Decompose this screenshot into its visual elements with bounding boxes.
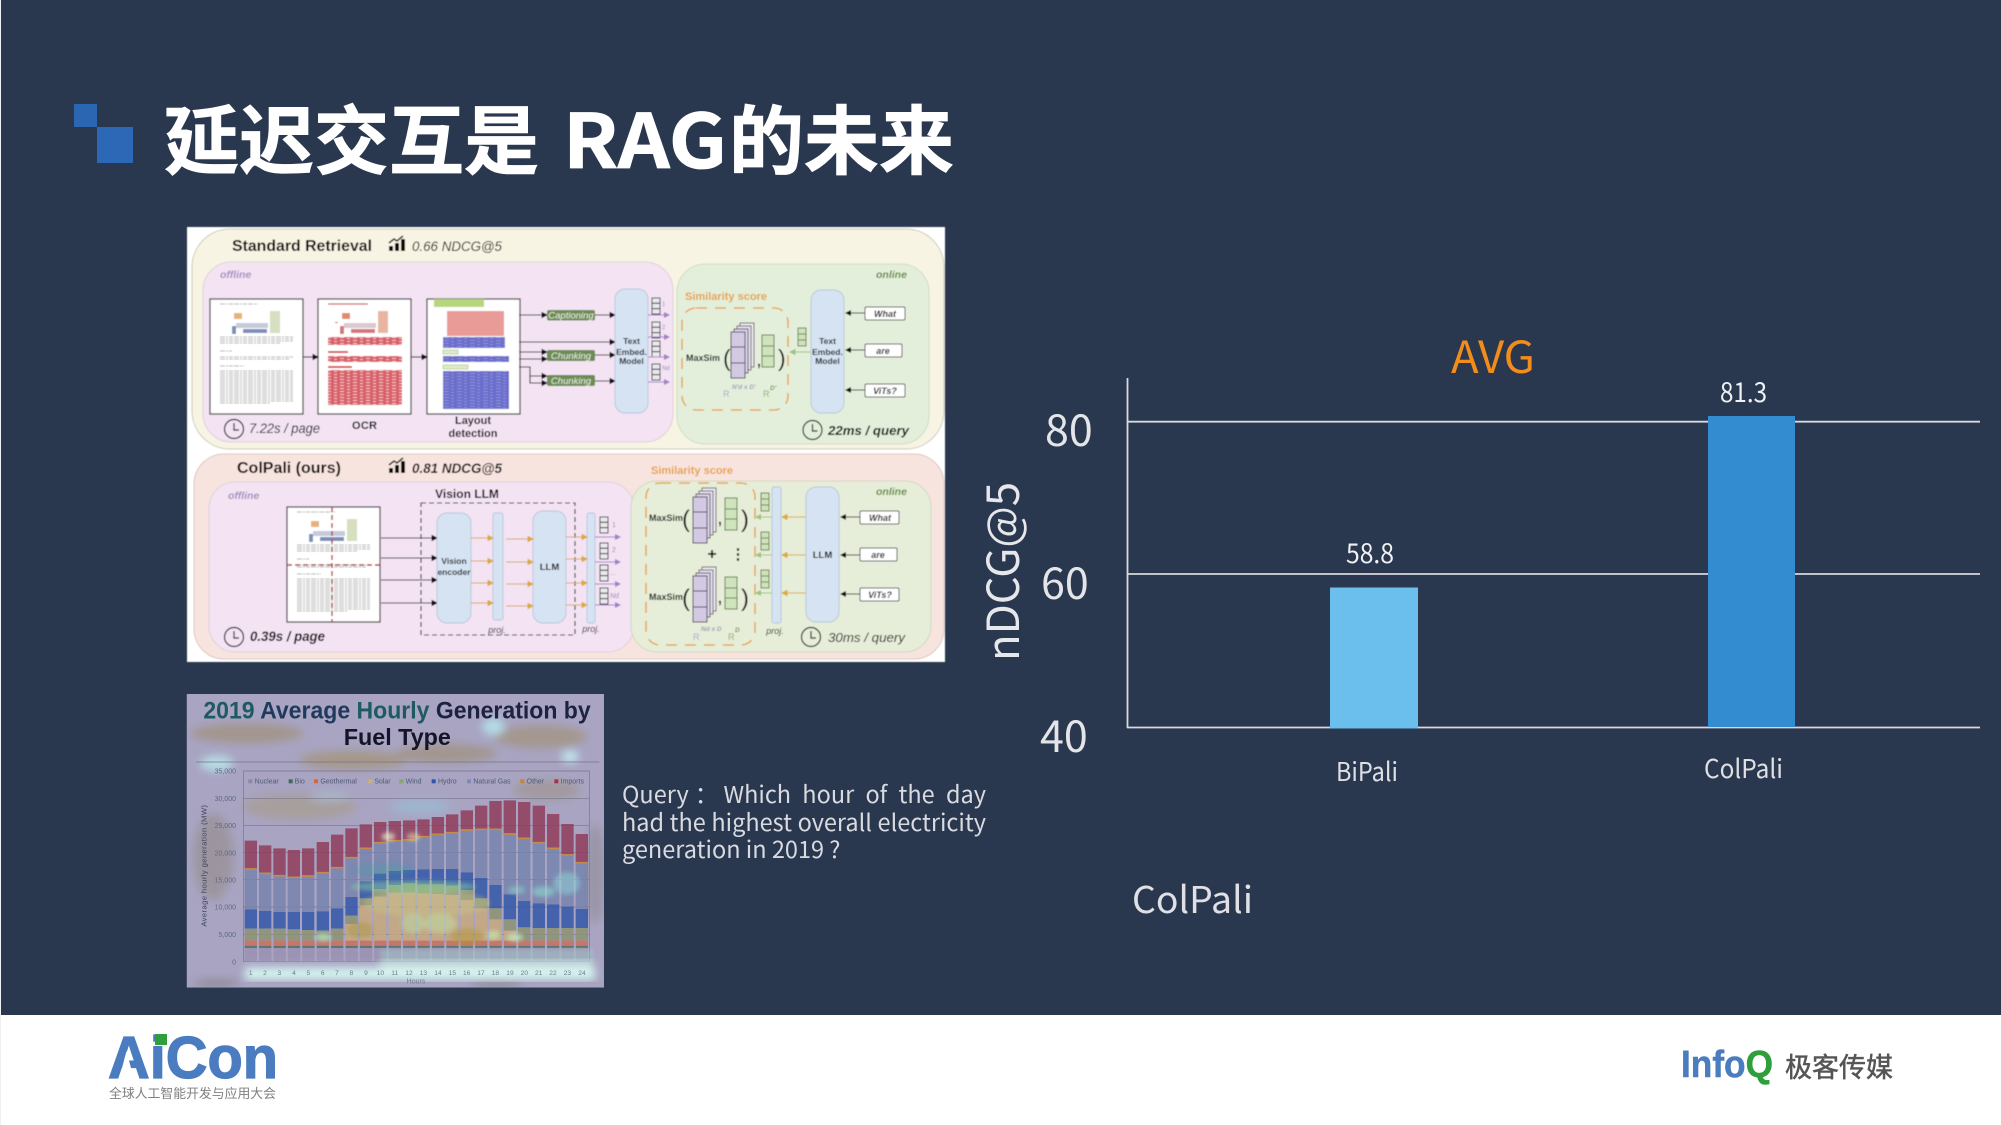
query text: had the highest overall electricity — [622, 804, 986, 838]
similarity score: R — [723, 389, 730, 399]
hour labels: 15 — [449, 970, 456, 977]
label: similarity score: Similarity score — [651, 465, 733, 477]
hour labels: 17 — [477, 970, 485, 977]
similarity score frame: , — [718, 590, 722, 606]
left edge highlight — [0, 0, 1, 1125]
box: LLM: LLM — [540, 562, 559, 573]
legend: Geothermal — [320, 779, 357, 786]
panel: offline encoding — [209, 482, 634, 652]
title icon: blue squares — [74, 104, 133, 163]
projection bar — [772, 487, 781, 623]
axis and tick labels: 5,000 — [219, 932, 236, 939]
heat overlay — [315, 833, 593, 963]
title: 的未来 — [729, 81, 954, 190]
panel: standard retrieval — [192, 229, 944, 449]
legend: Solar — [374, 779, 391, 786]
box: vision encoder: encoder — [437, 567, 471, 577]
y axis ticks: 40 — [1040, 703, 1088, 765]
category: BiPali: BiPali — [1336, 752, 1398, 789]
similarity score frame: R — [728, 632, 735, 642]
logo: A counter mask — [119, 1051, 134, 1080]
stacked bars by hour — [245, 800, 588, 955]
hour labels: 1 — [249, 970, 253, 977]
heading: ColPali (ours): ColPali (ours) — [237, 460, 341, 477]
query tokens — [841, 511, 899, 601]
title: RAG — [563, 81, 727, 190]
projection bar — [493, 513, 503, 620]
embedding stacks: 2 — [662, 325, 666, 331]
clock icon — [802, 628, 820, 646]
category: ColPali: ColPali — [1704, 749, 1783, 786]
box: vision encoder — [437, 513, 471, 623]
bar: ColPali — [1708, 416, 1795, 727]
logo: 极客传媒: 极客传媒 — [1785, 1046, 1893, 1085]
hour labels: 19 — [506, 970, 514, 977]
panel: offline pipeline — [203, 262, 673, 442]
axis and tick labels: 10,000 — [215, 905, 236, 912]
hour labels: 11 — [391, 970, 398, 977]
hour labels: 22 — [549, 970, 557, 977]
y axis ticks: 60 — [1041, 550, 1089, 612]
gold arrows — [782, 517, 806, 593]
query text: generation in 2019 ? — [622, 831, 840, 865]
box: Text Embed Model — [811, 290, 844, 413]
hour labels: 16 — [463, 970, 471, 977]
clock icon — [224, 628, 244, 646]
query tokens: are — [871, 550, 885, 560]
similarity score frame: ⋮ — [730, 546, 746, 563]
hour labels: 6 — [321, 970, 325, 977]
clock icon — [224, 420, 244, 438]
box: Text Embed Model — [615, 289, 648, 413]
box: Chunking: Chunking — [551, 376, 592, 387]
title: 延迟交互是 — [164, 81, 539, 190]
patch embeddings: 2 — [612, 547, 616, 554]
bottom heat band — [245, 961, 595, 980]
panel: ColPali architecture figure — [187, 227, 945, 662]
patch input arrows — [381, 538, 437, 603]
legend — [248, 779, 584, 786]
box: Text Embed Model: Text — [819, 336, 836, 346]
box: LLM — [533, 511, 566, 623]
label: OCR: OCR — [352, 420, 377, 432]
hour labels: 7 — [335, 970, 339, 977]
box: Chunking: Chunking — [551, 351, 592, 362]
chart gridlines — [196, 762, 599, 962]
value: 81.3: 81.3 — [1720, 371, 1767, 410]
legend: Imports — [561, 779, 584, 786]
timing: 7.22s per page: 7.22s / page — [249, 421, 320, 436]
gold flow arrows — [471, 537, 587, 606]
logo: AiCon: AiCon — [108, 1025, 278, 1091]
legend: Hydro — [438, 779, 457, 786]
hour labels: 13 — [420, 970, 427, 977]
axis and tick labels: 30,000 — [215, 796, 236, 803]
hour labels: 12 — [405, 970, 413, 977]
vision LLM dashed frame — [421, 503, 575, 635]
timing: 22ms per query: 22ms / query — [827, 423, 910, 438]
timing: 0.39s per page: 0.39s / page — [250, 629, 325, 644]
chart title: 2019 Average Hourly Generation by — [203, 698, 591, 724]
logo tagline: 全球人工智能开发与应用大会 — [109, 1086, 276, 1101]
embedding stacks: 1 — [662, 302, 666, 308]
query tokens: ViTs? — [868, 590, 892, 600]
hour labels: 24 — [578, 970, 586, 977]
legend: Nuclear — [255, 779, 279, 786]
similarity score frame: ( — [682, 506, 690, 533]
similarity score: Similarity score — [685, 291, 767, 303]
label: Vision LLM: Vision LLM — [435, 487, 499, 501]
similarity score: ( — [723, 345, 731, 371]
y axis title: nDCG@5 — [968, 482, 1032, 661]
metric: 0.81 NDCG@5: 0.81 NDCG@5 — [412, 461, 502, 476]
patch embeddings: Nd — [610, 593, 620, 600]
axis and tick labels: 0 — [232, 959, 236, 966]
query text: Query： Which hour of the day — [622, 776, 986, 810]
hour labels: 21 — [535, 970, 543, 977]
y axis title: Average hourly generation (MW) — [200, 805, 209, 927]
icon: metric chart — [389, 236, 405, 251]
hour labels: 20 — [521, 970, 528, 977]
similarity score frame: D — [735, 627, 740, 634]
projection bar — [587, 513, 595, 623]
logo: InfoQ: InfoQ — [1681, 1044, 1773, 1086]
query text — [622, 776, 986, 865]
embedding stacks — [648, 298, 670, 382]
hour labels — [249, 970, 586, 985]
similarity score: MaxSim — [686, 353, 720, 363]
patch embeddings: ... — [610, 570, 616, 577]
axis and tick labels: 35,000 — [215, 769, 236, 776]
hour labels: 3 — [277, 970, 281, 977]
hour labels: 2 — [263, 970, 267, 977]
label: proj.: proj. — [581, 624, 600, 634]
legend: Bio — [295, 779, 305, 786]
similarity score frame: ) — [741, 585, 749, 612]
similarity score: R — [763, 389, 770, 399]
panel: online pipeline — [677, 264, 929, 444]
box: LLM — [806, 487, 839, 622]
hour labels: 5 — [306, 970, 310, 977]
box: Text Embed Model: Model — [619, 356, 644, 366]
box: Text Embed Model: Text — [623, 336, 640, 346]
hour labels: 8 — [349, 970, 353, 977]
legend: Natural Gas — [473, 779, 511, 786]
legend: Wind — [406, 779, 422, 786]
heatmap chart image — [187, 694, 605, 988]
axis and tick labels: 20,000 — [215, 850, 236, 857]
document page 3: layout detection — [427, 299, 520, 414]
flow arrows — [303, 315, 615, 383]
bar chart: nDCG@5 — [968, 322, 1980, 789]
legend: Other — [527, 779, 545, 786]
caption: ColPali: ColPali — [1132, 870, 1253, 924]
similarity score: ) — [778, 345, 786, 371]
similarity score frame: MaxSim — [649, 513, 683, 523]
logo: InfoQ — [1681, 1044, 1893, 1086]
y axis ticks: 80 — [1045, 397, 1093, 459]
similarity score frame: MaxSim — [649, 592, 683, 602]
chart title: AVG: AVG — [1451, 322, 1535, 386]
query tokens — [846, 307, 905, 397]
hour labels: 23 — [564, 970, 571, 977]
similarity score frame: ( — [682, 585, 690, 612]
similarity score frame: Nd x D — [701, 626, 722, 633]
hour labels: 10 — [377, 970, 384, 977]
similarity score frame: , — [718, 511, 722, 527]
hour labels: 14 — [434, 970, 442, 977]
similarity score frame: R — [693, 632, 700, 642]
chart subtitle: Fuel Type — [344, 724, 451, 750]
heatmap background noise — [190, 718, 605, 988]
box: Text Embed Model: Embed. — [616, 347, 647, 357]
box: Text Embed Model: Model — [815, 356, 840, 366]
label: layout detection: detection — [449, 428, 498, 440]
axis and gridlines — [1127, 378, 1980, 728]
hour labels: 18 — [492, 970, 499, 977]
panel: offline pipeline: offline — [220, 269, 251, 281]
query tokens: What — [874, 309, 897, 319]
label: proj.: proj. — [487, 625, 506, 635]
query embedding — [790, 328, 811, 352]
panel: online pipeline: online — [876, 269, 907, 281]
similarity score: N'd x D' — [732, 384, 756, 391]
similarity score — [682, 291, 788, 410]
panel: ColPali — [194, 454, 944, 659]
metric: 0.66 NDCG@5: 0.66 NDCG@5 — [412, 239, 502, 254]
similarity score: , — [757, 353, 761, 369]
hour labels: Hours — [407, 978, 426, 985]
embedding stacks: Nd — [662, 366, 670, 372]
similarity score frame: ) — [741, 506, 749, 533]
axis and tick labels — [215, 769, 236, 966]
document page with patch grid — [287, 507, 380, 622]
logo: green mark — [155, 1034, 167, 1045]
query embeddings — [756, 493, 772, 593]
box: Text Embed Model: Embed. — [812, 347, 843, 357]
icon: metric chart — [389, 458, 405, 473]
box: Captioning: Captioning — [548, 310, 594, 322]
query tokens: What — [869, 513, 892, 523]
label: proj.: proj. — [765, 626, 784, 636]
similarity score: D' — [770, 385, 777, 392]
axis and tick labels: 25,000 — [215, 823, 236, 830]
document page 2: OCR — [318, 299, 411, 414]
timing: 30ms per query: 30ms / query — [828, 630, 907, 645]
panel: online scoring: online — [876, 486, 907, 498]
label: layout detection: Layout — [455, 415, 491, 427]
similarity score frame — [646, 483, 755, 645]
document page 1 — [210, 299, 303, 414]
query tokens: ViTs? — [873, 386, 897, 396]
hour labels: 4 — [292, 970, 296, 977]
panel: online scoring — [631, 481, 931, 652]
box: LLM: LLM — [813, 550, 832, 561]
title — [164, 81, 954, 190]
box: vision encoder: Vision — [441, 556, 467, 566]
patch embeddings: 1 — [612, 522, 616, 529]
similarity score frame: + — [707, 546, 717, 563]
bar: BiPali — [1330, 588, 1418, 728]
clock icon — [803, 420, 822, 440]
footer band — [1, 1015, 2001, 1125]
query tokens: are — [876, 346, 890, 356]
patch embeddings — [595, 517, 620, 605]
hour labels: 9 — [364, 970, 368, 977]
y axis ticks — [1040, 397, 1093, 765]
panel: offline encoding: offline — [228, 490, 259, 502]
heading: standard retrieval: Standard Retrieval — [232, 238, 372, 255]
value: 58.8: 58.8 — [1346, 532, 1394, 571]
axis and tick labels: 15,000 — [215, 877, 236, 884]
